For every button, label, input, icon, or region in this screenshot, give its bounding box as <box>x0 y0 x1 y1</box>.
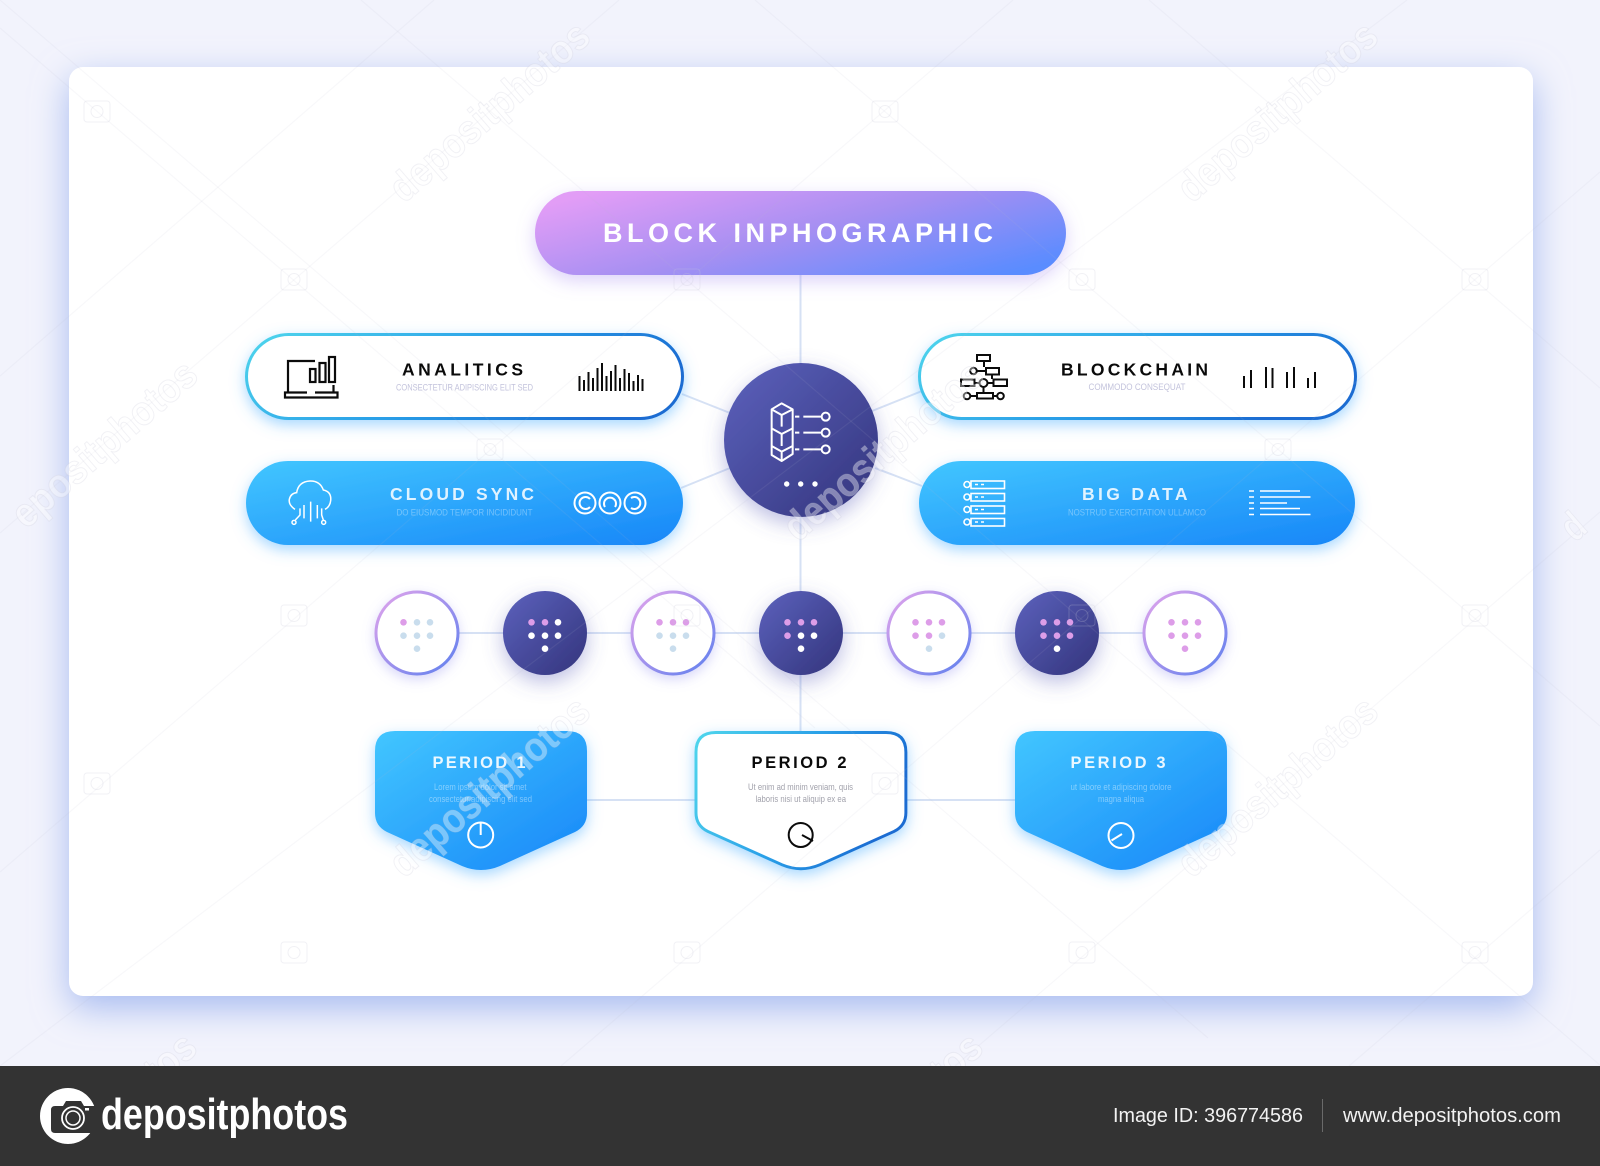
blockchain heading: BLOCKCHAIN <box>1061 360 1208 380</box>
big data heading: BIG DATA <box>1082 484 1188 504</box>
panel: analitics <box>246 334 682 418</box>
period 2 body text <box>748 782 853 805</box>
blockchain subtitle: COMMODO CONSEQUAT <box>1088 382 1186 392</box>
icon: three spirals <box>574 492 646 514</box>
icon: dial low <box>789 823 813 847</box>
title text: BLOCK INPHOGRAPHIC <box>603 218 993 248</box>
icon: flowchart <box>961 355 1007 399</box>
icon: server list <box>964 481 1004 526</box>
period 3 body text: ut labore et adipiscing dolore <box>1070 782 1172 793</box>
footer divider <box>1322 1099 1324 1132</box>
icon: cloud circuit <box>289 481 331 524</box>
icon: laptop with bars <box>285 357 338 398</box>
timeline node 3 <box>632 592 714 674</box>
icon: paired bars <box>1244 367 1315 388</box>
watermark text: tos <box>920 1023 991 1094</box>
connector lines <box>417 270 1185 800</box>
watermark text: depositphotos <box>1168 687 1387 886</box>
period 2 heading: PERIOD 2 <box>752 754 846 772</box>
period 1 body text <box>429 782 532 805</box>
panel: cloud sync <box>246 461 683 545</box>
image id: Image ID: 396774586 <box>1113 1105 1303 1127</box>
period 2 body text: Ut enim ad minim veniam, quis <box>748 782 853 793</box>
timeline node 5 <box>888 592 970 674</box>
watermark text: tos <box>134 1023 205 1094</box>
period 3 body text <box>1070 782 1172 805</box>
website url: www.depositphotos.com <box>1342 1105 1561 1127</box>
analitics heading: ANALITICS <box>402 360 523 380</box>
icon: bar signal <box>580 363 642 391</box>
timeline node 2 <box>503 591 587 675</box>
timeline node 1 <box>376 592 458 674</box>
hub dots <box>784 481 818 487</box>
icon: block stack <box>772 403 830 461</box>
panel: big data <box>919 461 1355 545</box>
panel: blockchain <box>920 334 1356 418</box>
period 3 heading: PERIOD 3 <box>1070 754 1166 772</box>
white card panel <box>69 67 1533 996</box>
timeline node 4 <box>759 591 843 675</box>
watermark text: depositphotos <box>774 351 993 550</box>
timeline node 6 <box>1015 591 1099 675</box>
period 1 body text: Lorem ipsum dolor sit amet <box>434 782 527 793</box>
cloud sync subtitle: DO EIUSMOD TEMPOR INCIDIDUNT <box>396 508 533 518</box>
central hub circle <box>724 363 878 517</box>
watermark text: d <box>1551 503 1595 550</box>
cloud sync heading: CLOUD SYNC <box>390 484 534 504</box>
watermark text: depositphotos <box>380 687 599 886</box>
icon: text lines <box>1249 491 1310 514</box>
period 2 body text: laboris nisi ut aliquip ex ea <box>756 794 847 805</box>
period 1 body text: consectetur adipiscing elit sed <box>429 794 532 805</box>
icon: power dial <box>468 822 493 848</box>
logo wordmark: depositphotos <box>101 1090 348 1139</box>
timeline node 7 <box>1144 592 1226 674</box>
watermark text: epositphotos <box>2 351 206 537</box>
analitics subtitle: CONSECTETUR ADIPISCING ELIT SED <box>396 382 533 392</box>
footer bar <box>0 1066 1600 1166</box>
icon: dial high <box>1108 823 1134 848</box>
watermark cameras <box>84 101 1488 963</box>
panel: period 2 <box>696 732 906 869</box>
big data subtitle: NOSTRUD EXERCITATION ULLAMCO <box>1068 508 1206 518</box>
panel: period 3 <box>1015 731 1227 870</box>
title pill <box>535 191 1066 275</box>
panel: period 1 <box>375 731 587 870</box>
period 1 heading: PERIOD 1 <box>432 754 526 772</box>
period 3 body text: magna aliqua <box>1098 794 1145 805</box>
icon: camera logo <box>40 1088 96 1144</box>
